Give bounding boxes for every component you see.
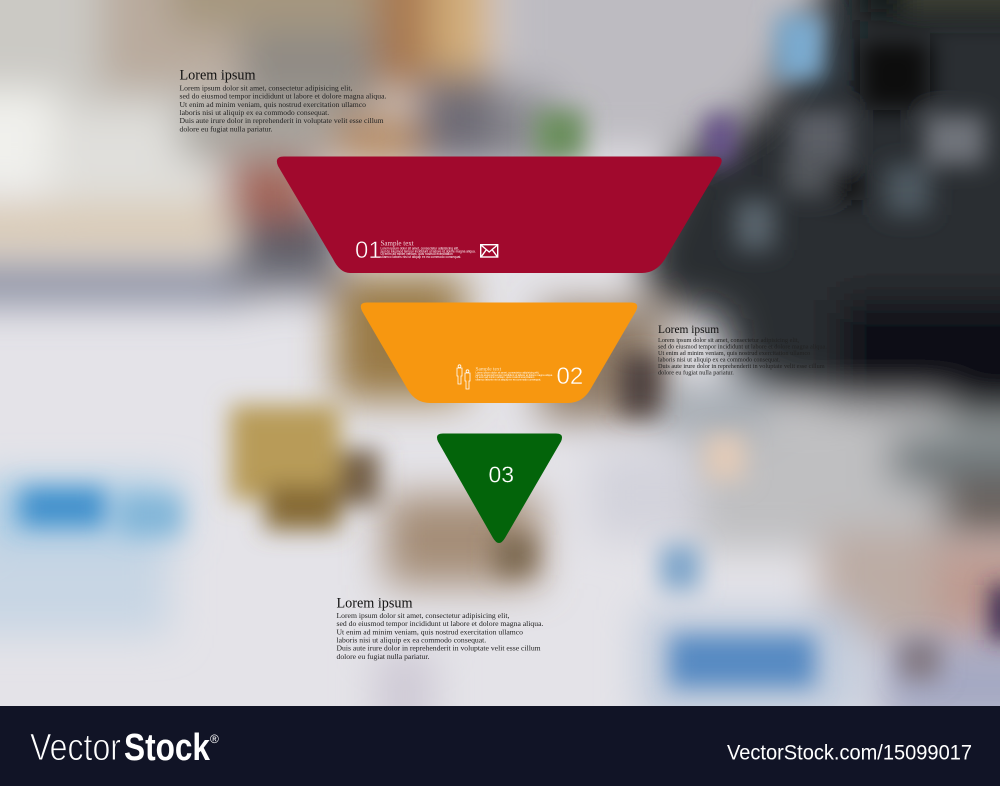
- funnel segment 03: green: [437, 434, 562, 543]
- text block: right: dolore eu fugiat nulla pariatur.: [658, 370, 734, 376]
- number 01: 01: [355, 237, 382, 264]
- icon: two people: [457, 365, 470, 389]
- text block: top left: Ut enim ad minim veniam, quis nostrud exercitation ullamco: [180, 100, 366, 109]
- sample text: segment 01: ullamco laboris nisi ut aliquip ex ea commodo consequat.: [380, 255, 461, 259]
- logo: VectorStock: ®: [210, 732, 219, 746]
- text block: bottom: dolore eu fugiat nulla pariatur.: [336, 652, 429, 661]
- sample text: segment 02: ullamco laboris nisi ut aliquip ex ea commodo consequat.: [476, 377, 541, 381]
- text block: right: Duis aute irure dolor in reprehenderit in voluptate velit esse cillum: [658, 363, 825, 370]
- sample text: segment 01: sed do eiusmod tempor incididunt ut labore et dolore magna aliqua.: [380, 249, 476, 253]
- sample text: segment 01: Lorem ipsum dolor sit amet, consectetur adipisicing elit,: [380, 246, 459, 250]
- text block: top left: Lorem ipsum dolor sit amet, consectetur adipisicing elit,: [180, 84, 352, 92]
- text block: right: [658, 324, 827, 376]
- number 03: 03: [488, 462, 514, 488]
- text block: right: Lorem ipsum dolor sit amet, consectetur adipisicing elit,: [658, 337, 800, 344]
- sample text: segment 02: Lorem ipsum dolor sit amet, consectetur adipisicing elit,: [476, 371, 539, 375]
- text block: top left: dolore eu fugiat nulla pariatur.: [180, 124, 272, 133]
- text block: bottom: Lorem ipsum: [336, 596, 413, 612]
- sample text: segment 01: Sample text: [380, 240, 414, 248]
- text block: right: Ut enim ad minim veniam, quis nostrud exercitation ullamco: [658, 350, 810, 357]
- footer bar: [0, 706, 1000, 786]
- sample text: segment 02: sed do eiusmod tempor incididunt ut labore et dolore magna aliqua.: [476, 373, 553, 377]
- sample text: segment 01: Ut enim ad minim veniam, quis nostrud exercitation: [380, 252, 453, 256]
- logo: VectorStock: [30, 727, 219, 769]
- text block: bottom: Lorem ipsum dolor sit amet, consectetur adipisicing elit,: [336, 611, 509, 620]
- sample text: segment 01: [380, 240, 476, 259]
- text block: right: Lorem ipsum: [658, 324, 719, 336]
- sample text: segment 02: Sample text: [476, 366, 502, 372]
- logo: VectorStock: Vector: [30, 727, 121, 769]
- text block: top left: laboris nisi ut aliquip ex ea commodo consequat.: [180, 108, 329, 117]
- text block: right: laboris nisi ut aliquip ex ea commodo consequat.: [658, 356, 781, 363]
- funnel segment 01: red: [277, 156, 722, 273]
- text block: top left: Duis aute irure dolor in reprehenderit in voluptate velit esse cillum: [180, 116, 384, 125]
- text block: bottom: Duis aute irure dolor in reprehenderit in voluptate velit esse cillum: [336, 644, 541, 653]
- text block: bottom: Ut enim ad minim veniam, quis nostrud exercitation ullamco: [336, 627, 523, 636]
- sample text: segment 02: Ut enim ad minim veniam, quis nostrud exercitation: [476, 375, 535, 379]
- text block: bottom: [336, 596, 543, 661]
- number 02: 02: [556, 363, 583, 390]
- text block: top left: Lorem ipsum: [180, 68, 256, 84]
- funnel segment 02: orange: [361, 302, 637, 403]
- text block: right: sed do eiusmod tempor incididunt ut labore et dolore magna aliqua.: [658, 343, 827, 350]
- sample text: segment 02: [476, 366, 553, 381]
- text block: bottom: laboris nisi ut aliquip ex ea commodo consequat.: [336, 636, 486, 644]
- logo: VectorStock: Stock: [124, 727, 211, 769]
- text block: top left: [180, 68, 386, 133]
- image id: VectorStock.com/15099017: [727, 742, 972, 764]
- icon: envelope: [481, 245, 498, 257]
- text block: top left: sed do eiusmod tempor incididunt ut labore et dolore magna aliqua.: [180, 92, 386, 101]
- text block: bottom: sed do eiusmod tempor incididunt ut labore et dolore magna aliqua.: [336, 619, 543, 628]
